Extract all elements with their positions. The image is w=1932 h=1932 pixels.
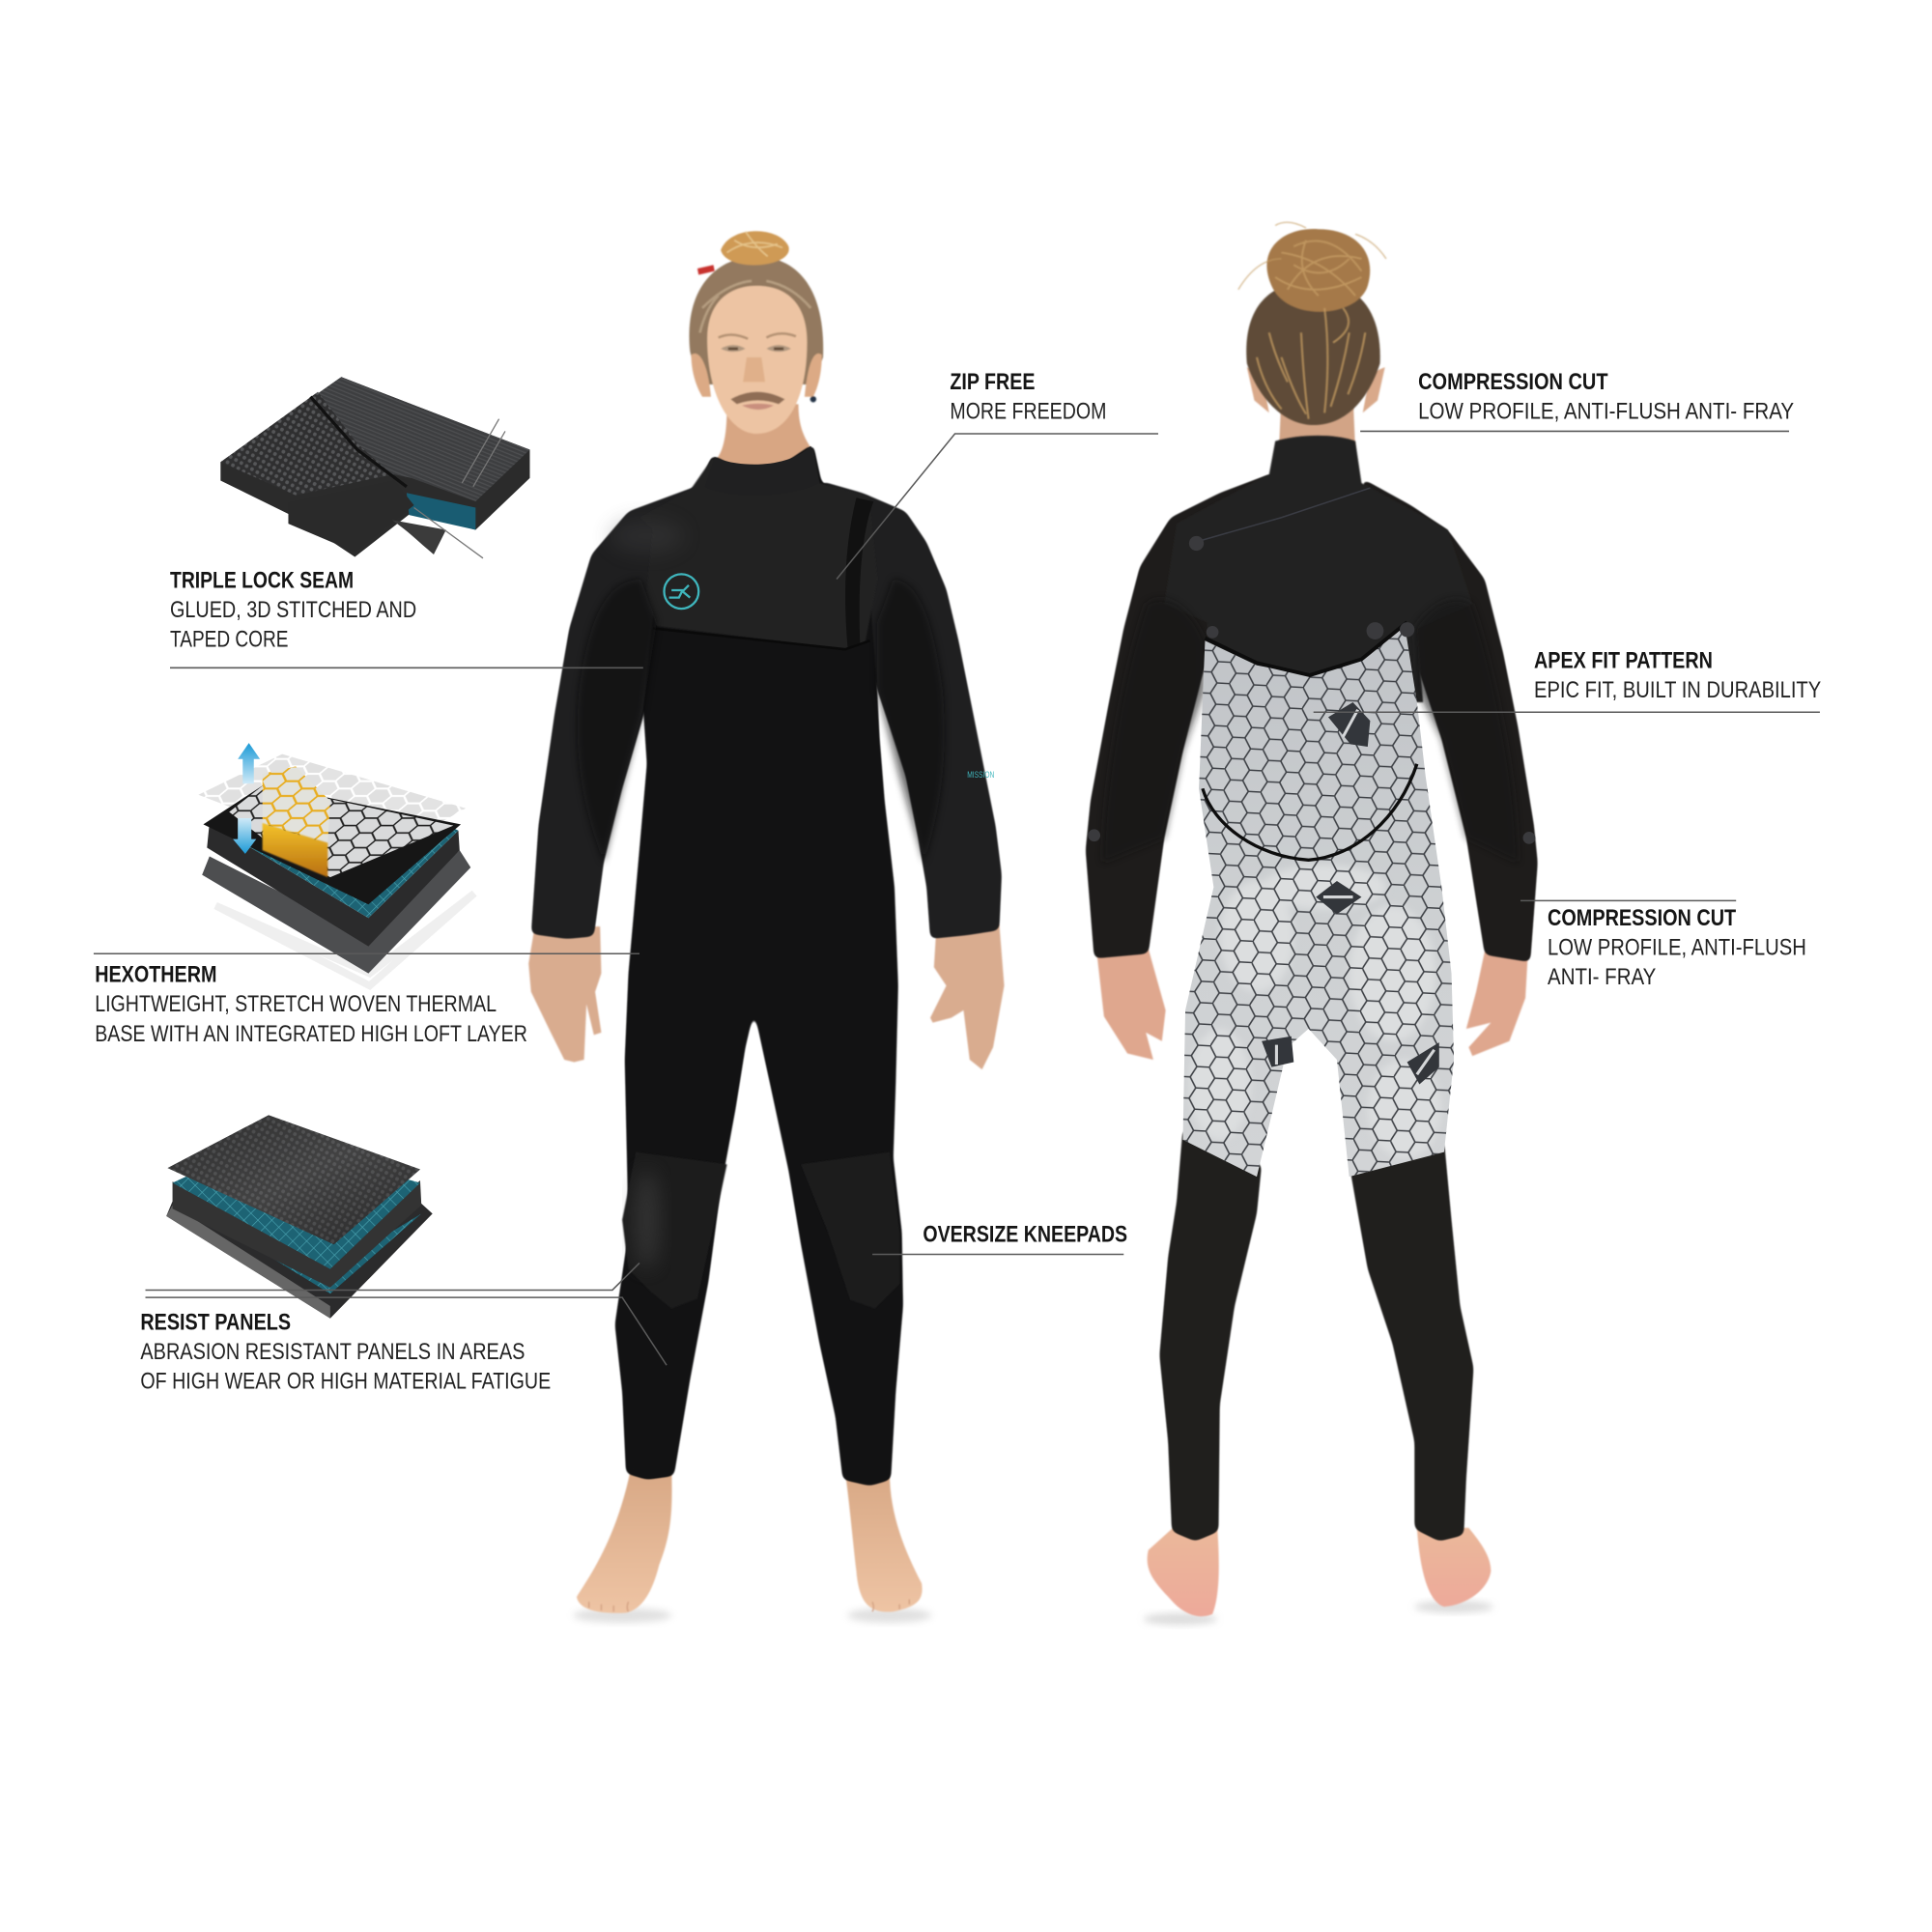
kneepad right: [801, 1152, 899, 1309]
callout: hexotherm: [94, 953, 639, 1046]
rivets: [1088, 536, 1535, 844]
feet front: [577, 1468, 923, 1613]
seam threads: [414, 419, 505, 558]
arm and hand: subject left: [819, 480, 1005, 1069]
knee highlight: [635, 1171, 659, 1269]
callout: resist panels: [140, 1263, 667, 1393]
arrow down: [233, 818, 256, 854]
heated hex region: [263, 766, 330, 842]
callout: compression cut wrist: LOW PROFILE, ANTI-FLUSH: [1548, 935, 1806, 960]
icon: hexotherm swatch: [198, 743, 474, 985]
callout: triple lock seam: TAPED CORE: [170, 627, 288, 652]
ghost top sheet: [198, 754, 466, 863]
wetsuit torso and legs: [614, 443, 903, 1486]
seam block side faces: [220, 377, 529, 557]
icon: triple lock seam swatch: [220, 377, 529, 558]
dark logo hexagons: [1262, 702, 1439, 1084]
callout: apex fit pattern: EPIC FIT, BUILT IN DURABILITY: [1534, 677, 1821, 702]
callout: compression cut wrist: COMPRESSION CUT: [1548, 905, 1737, 930]
lighter fabric patches: [1189, 865, 1441, 1158]
callout: resist panels: OF HIGH WEAR OR HIGH MATERIAL FATIGUE: [140, 1369, 551, 1394]
figure: front view in wetsuit: [528, 231, 1005, 1623]
shoulder highlight: [610, 519, 684, 554]
arm and hand: subject right: [528, 483, 705, 1062]
neck yoke curve: [1205, 622, 1407, 675]
cut section: [407, 493, 475, 529]
seam ridge: [310, 397, 407, 487]
molten core: [263, 823, 327, 877]
arrow up: [238, 743, 260, 783]
callout: compression cut wrist: [1520, 900, 1806, 989]
callout: compression cut neck: LOW PROFILE, ANTI-FLUSH ANTI- FRAY: [1418, 399, 1794, 424]
hands back: [1096, 949, 1528, 1060]
thick block: [173, 1180, 421, 1288]
legs back: [1159, 1127, 1474, 1542]
collar: [705, 446, 819, 496]
callout: hexotherm: LIGHTWEIGHT, STRETCH WOVEN THERMAL: [95, 991, 497, 1016]
seam block top surface: [220, 377, 529, 501]
underarm shadow right: [877, 579, 945, 863]
callout: zip free: [837, 369, 1158, 579]
sleeve text: MISSION: [967, 770, 994, 780]
chest panel: [640, 448, 877, 649]
textured left surface: [220, 392, 392, 496]
callout: resist panels: RESIST PANELS: [140, 1309, 291, 1334]
callout: compression cut wrist: ANTI- FRAY: [1548, 964, 1657, 989]
figure: back view in wetsuit: [1086, 222, 1538, 1625]
front block: [288, 480, 414, 552]
shoulder darkness right: [1414, 599, 1518, 863]
hair back: [1238, 222, 1386, 425]
callout: triple lock seam: GLUED, 3D STITCHED AND: [170, 597, 416, 622]
shoulder darkness: [1103, 599, 1205, 863]
bottom grey sheet: [202, 850, 470, 974]
logo marks on lining: [1276, 710, 1435, 1074]
teal upper: [173, 1140, 420, 1269]
chest panel edge: [1203, 764, 1417, 860]
zip line: [1195, 488, 1370, 542]
callout: hexotherm: HEXOTHERM: [95, 962, 216, 987]
mesh band: [174, 1198, 421, 1293]
callout: oversize kneepads: OVERSIZE KNEEPADS: [923, 1222, 1127, 1247]
callout: triple lock seam: [170, 567, 643, 668]
upper back panel: [1164, 436, 1472, 702]
black upper sheet: [203, 784, 461, 904]
grey hexotherm lining: [1182, 630, 1454, 1177]
zip free strap: [845, 497, 873, 648]
icon: resist panels swatch: [166, 1115, 433, 1319]
callout: resist panels: ABRASION RESISTANT PANELS IN AREAS: [140, 1339, 525, 1364]
callout: compression cut neck: [1360, 369, 1794, 431]
callout: triple lock seam: TRIPLE LOCK SEAM: [170, 567, 354, 592]
carbon top sheet: [167, 1115, 420, 1244]
logo badge: [665, 574, 698, 609]
callout: zip free: MORE FREEDOM: [950, 399, 1106, 424]
callout: compression cut neck: COMPRESSION CUT: [1418, 369, 1608, 394]
neck and ears: [1247, 367, 1385, 450]
dark block layer: [207, 823, 460, 947]
kneepad left: [622, 1152, 727, 1309]
callout: hexotherm: BASE WITH AN INTEGRATED HIGH LOFT LAYER: [95, 1021, 527, 1046]
grey edge: [166, 1205, 330, 1319]
arms back: [1086, 472, 1538, 962]
head front: [689, 231, 823, 487]
callout: apex fit pattern: APEX FIT PATTERN: [1534, 647, 1713, 672]
chest seam: [653, 629, 870, 649]
bottom sheet: [166, 1202, 433, 1319]
foot shadows front: [573, 1608, 931, 1623]
foot shadows back: [1144, 1601, 1493, 1625]
teal upper surface: [210, 788, 458, 918]
tape strip: [392, 520, 446, 554]
underarm shadow left: [578, 579, 657, 863]
callout: apex fit pattern: [1314, 647, 1821, 712]
bottom ghost hexagon layer: [215, 894, 474, 985]
feet back: [1148, 1528, 1491, 1616]
hex sheet: [229, 784, 453, 877]
callout: zip free: ZIP FREE: [950, 369, 1035, 394]
